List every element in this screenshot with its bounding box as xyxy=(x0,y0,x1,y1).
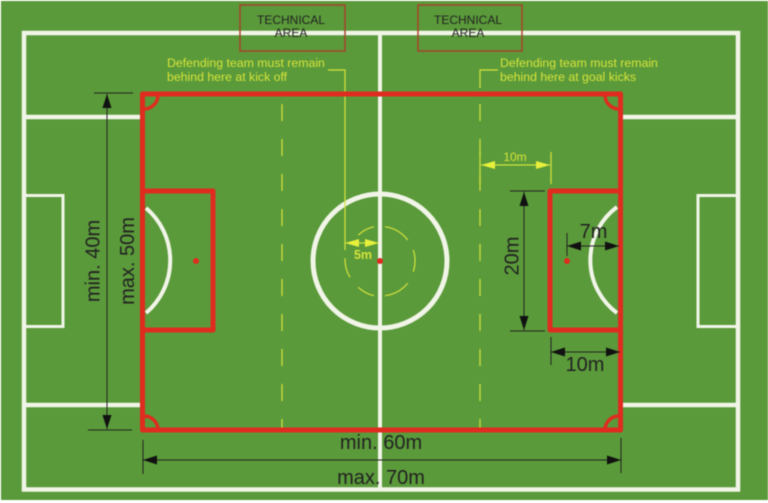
penalty and center spots xyxy=(193,258,570,264)
dimension: 10m yellow xyxy=(481,150,550,165)
dimension: 5m: 5m xyxy=(354,248,372,262)
technical area right: TECHNICAL xyxy=(434,13,502,27)
dimension: 7m xyxy=(567,221,619,256)
dimension: field width: min. 40m xyxy=(82,220,104,302)
dimension: 10m yellow: 10m xyxy=(503,150,527,164)
technical area left xyxy=(240,5,345,51)
dimension: field width xyxy=(82,93,139,430)
dimension: field width: max. 50m xyxy=(117,217,139,305)
technical area left: TECHNICAL xyxy=(257,13,325,27)
technical area left: AREA xyxy=(275,26,307,40)
note: kick off: Defending team must remain xyxy=(167,56,325,70)
dimension: 20m xyxy=(502,191,545,331)
note: goal kicks: behind here at goal kicks xyxy=(500,70,636,84)
dimension: field length xyxy=(143,432,621,489)
note: kick off: behind here at kick off xyxy=(167,70,288,84)
technical area right xyxy=(418,5,522,51)
red field boundary xyxy=(142,94,621,430)
note: goal kicks: Defending team must remain xyxy=(500,56,658,70)
note: goal kicks xyxy=(500,56,658,84)
dimension: 20m: 20m xyxy=(502,237,524,275)
dimension: field length: min. 60m xyxy=(340,432,422,454)
dimension: 10m black xyxy=(551,337,620,376)
dimension: 7m: 7m xyxy=(580,221,607,243)
dimension: 10m black: 10m xyxy=(566,354,604,376)
technical area right: AREA xyxy=(452,26,484,40)
dimension: field length: max. 70m xyxy=(337,467,425,489)
center circle xyxy=(313,194,447,328)
dimension: 5m xyxy=(345,243,379,262)
note: kick off xyxy=(167,56,325,84)
penalty arcs xyxy=(146,207,617,313)
dashed futsal lines xyxy=(282,70,551,430)
